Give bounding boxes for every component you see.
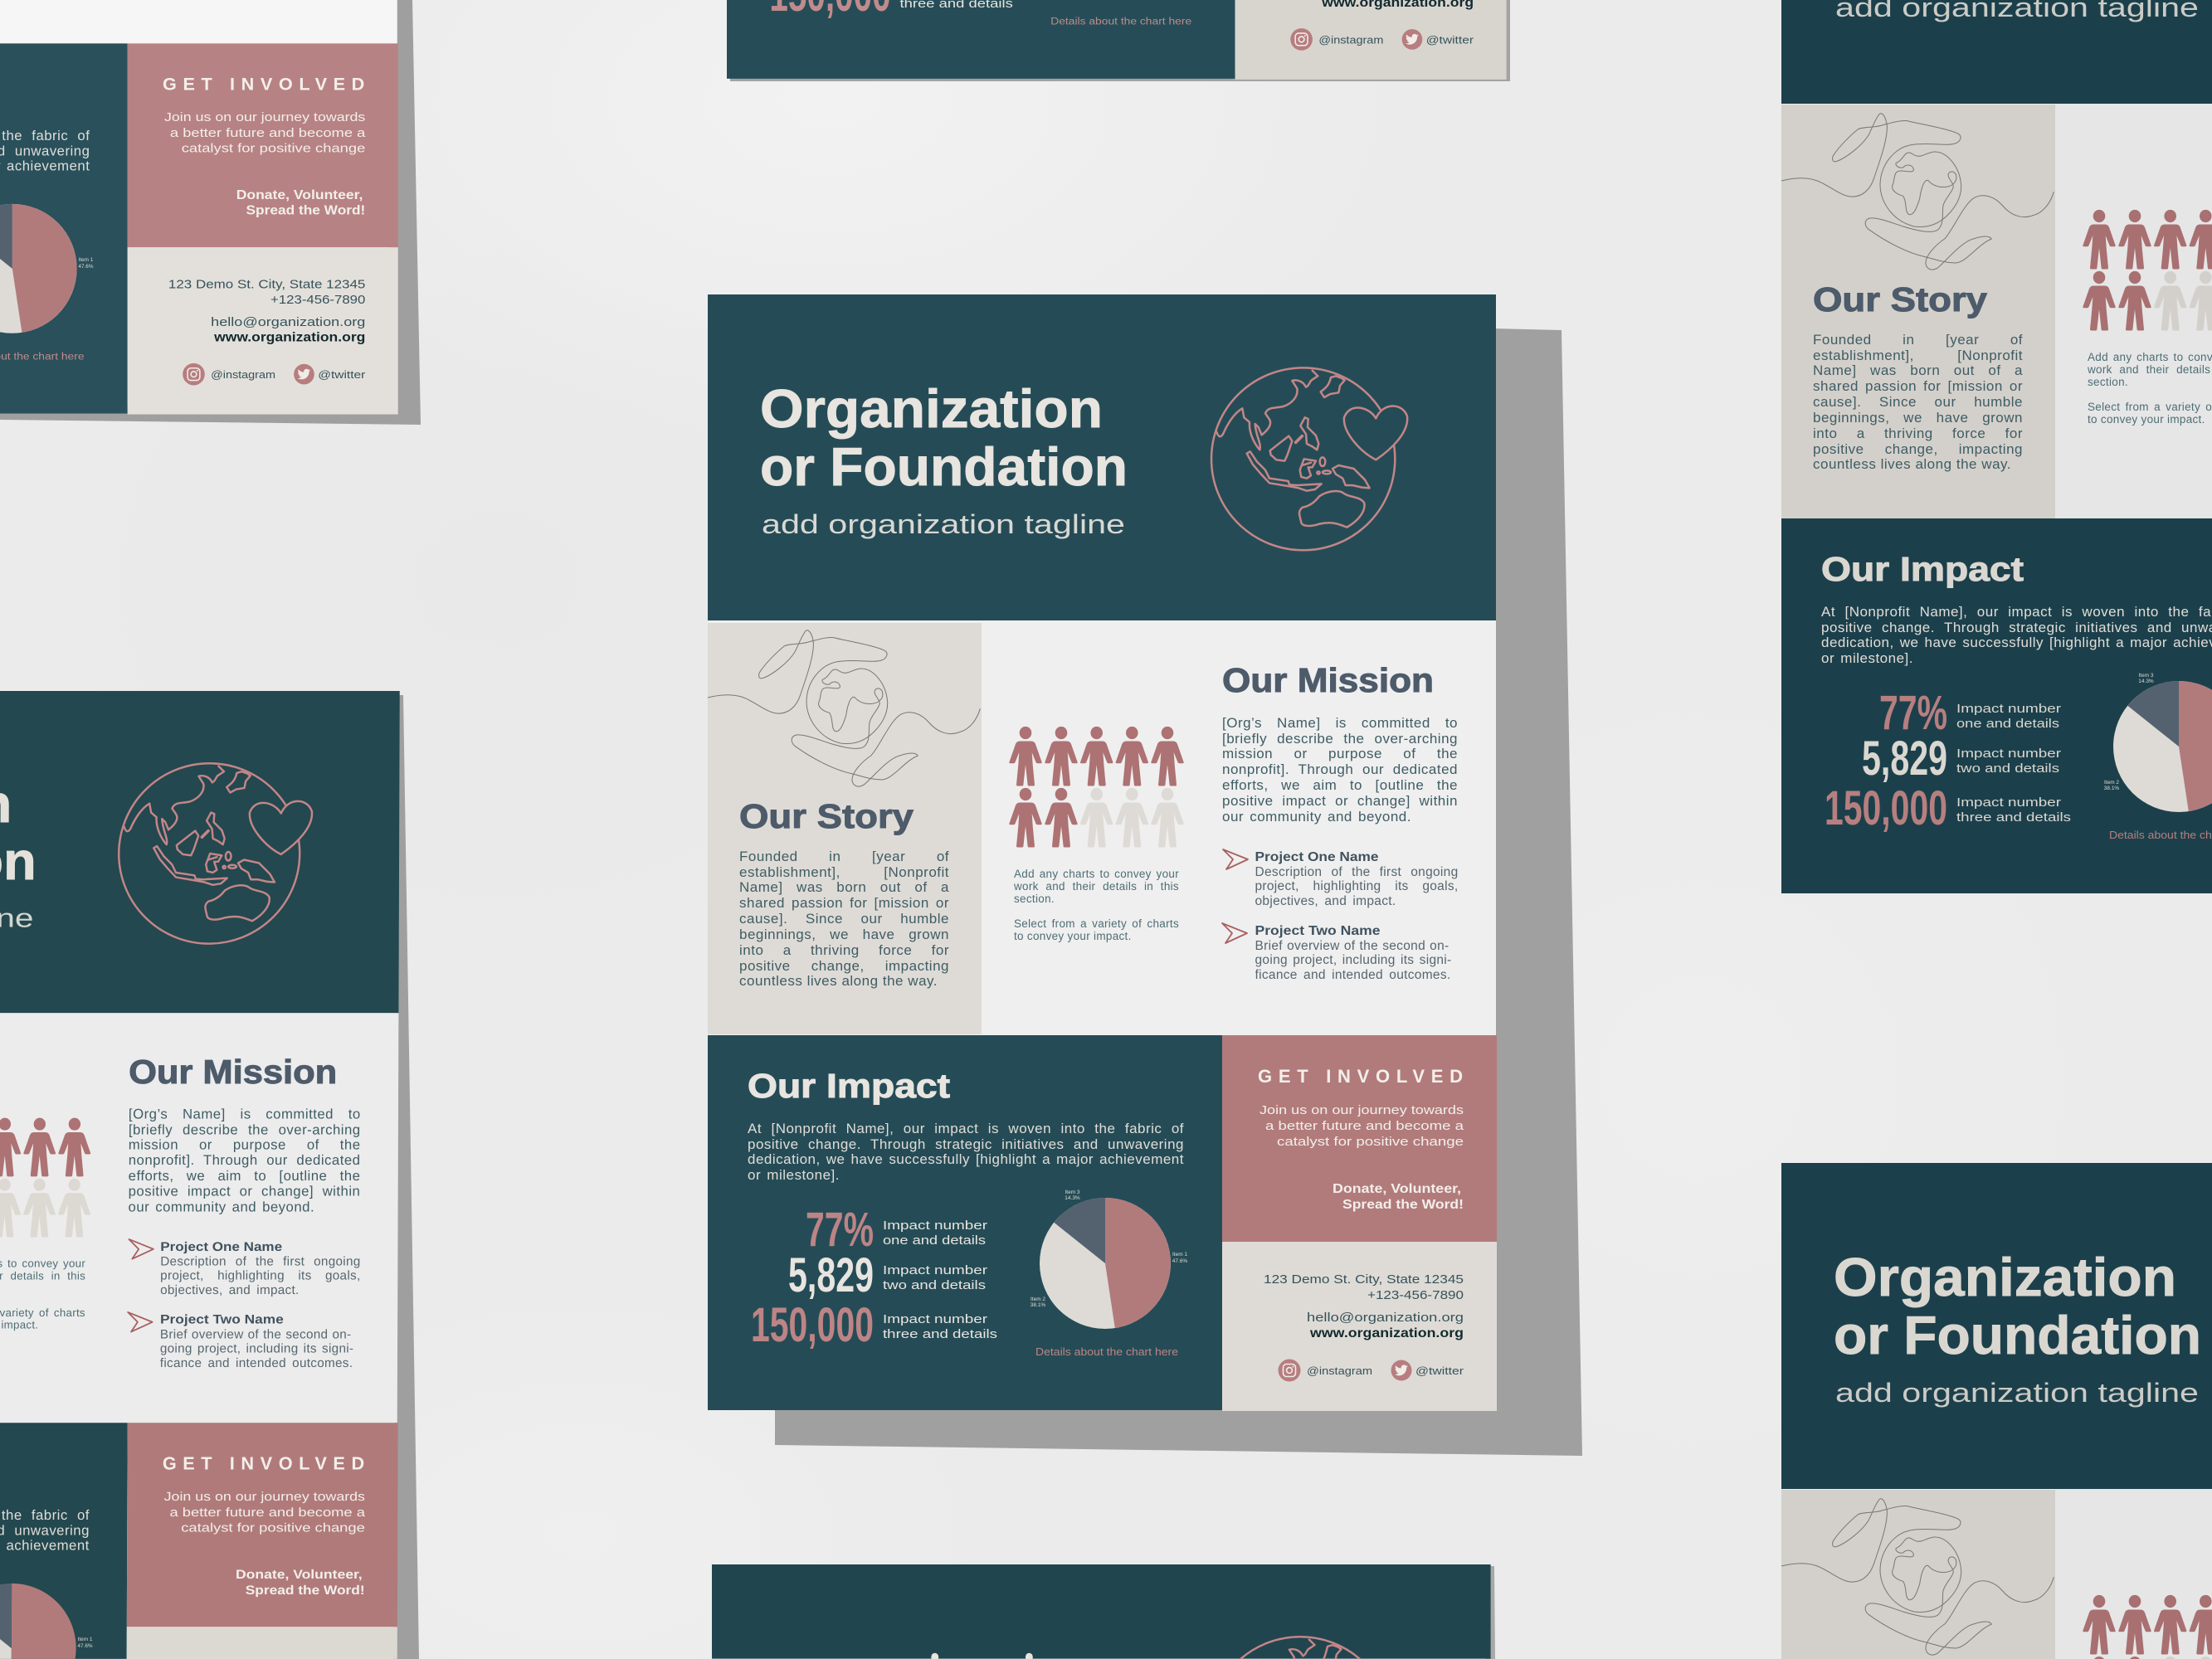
contact text: hello@organization.org [211, 316, 365, 329]
icon: arrow [1222, 923, 1247, 943]
icon: twitter [1391, 1360, 1412, 1380]
donate text: Donate, Volunteer, [236, 1568, 363, 1582]
impact number two: 5,829 [788, 1248, 874, 1302]
pie labels: 47.6% [1172, 1258, 1187, 1264]
flyer: right bottom [1781, 1163, 2212, 1659]
heading: our impact: Our Impact [748, 1067, 950, 1105]
heading: our impact: Our Impact [1821, 550, 2024, 588]
project one: project, highlighting its goals, [160, 1269, 361, 1283]
pie chart [2113, 681, 2212, 812]
impact paragraph [0, 1508, 90, 1574]
icon: globe with heart [1211, 367, 1407, 550]
pie labels: Item 1 [1172, 1252, 1187, 1258]
impact number two [1862, 732, 2061, 786]
chart note: Add any charts to convey your [1014, 868, 1179, 880]
title [1834, 1247, 2201, 1365]
shadow: top-centre flyer [730, 0, 1510, 81]
impact number one: Impact number [883, 1219, 987, 1233]
title: or Foundation [760, 436, 1128, 497]
chart note: section. [1014, 893, 1055, 905]
impact number three: 150,000 [1825, 781, 1947, 835]
twitter handle: @twitter [1415, 1365, 1464, 1377]
story paragraph: shared passion for [mission or [739, 895, 949, 911]
chart note: Select from a variety of charts [1014, 917, 1179, 930]
heading: our story: Our Story [1813, 280, 1987, 319]
mission paragraph: [briefly describe the over-arching [129, 1121, 361, 1137]
flyer: bottom-centre cropped [712, 1564, 1491, 1659]
story paragraph: beginnings, we have grown [739, 927, 949, 942]
story paragraph: positive change, impacting [739, 958, 949, 974]
impact paragraph: or milestone]. [748, 1167, 840, 1183]
contact text: 123 Demo St. City, State 12345 [1264, 1272, 1464, 1287]
instagram handle: @instagram [1318, 33, 1383, 46]
impact paragraph: dedication, we have successfully [highlight a major achievement [748, 1151, 1184, 1167]
pie labels: Item 2 [1030, 1297, 1045, 1302]
call to action text: catalyst for positive change [1277, 1135, 1464, 1149]
impact paragraph [1821, 605, 2212, 671]
chart caption: Details about the chart here [1050, 16, 1191, 27]
panel: our story [1781, 1490, 2055, 1659]
icon: globe top [1241, 1637, 1360, 1659]
flyer: central main [708, 294, 1497, 1411]
flyer: top-centre cropped [727, 0, 1507, 80]
title letter tops [931, 1653, 1033, 1659]
project two: ficance and intended outcomes. [1255, 968, 1450, 982]
contact text [1264, 1272, 1464, 1340]
project one: Project One Name [160, 1240, 282, 1254]
chart note: work and their details in this [1014, 880, 1179, 893]
impact number two: Impact number [883, 1263, 987, 1277]
story paragraph: beginnings, we have grown [1813, 410, 2023, 426]
story paragraph: establishment], [Nonprofit [1813, 348, 2023, 363]
heading: get involved: GET INVOLVED [163, 74, 364, 95]
chart note [0, 1258, 85, 1340]
panel: contact [127, 1627, 397, 1659]
icon: arrow [129, 1239, 153, 1259]
panel: get involved [127, 1423, 398, 1627]
heading: our mission: Our Mission [1222, 661, 1434, 699]
title: Organization [1834, 1247, 2176, 1307]
shadow: bottom-centre flyer [1485, 1566, 1495, 1659]
panel: get involved [1222, 1035, 1497, 1242]
impact number one: 77% [1879, 686, 1947, 740]
impact number two [788, 1248, 987, 1302]
impact number two: Impact number [1956, 747, 2061, 761]
call to action text [1259, 1103, 1464, 1149]
panel: white body [0, 1013, 398, 1423]
chart caption: Details about the chart here [1035, 1346, 1178, 1358]
story paragraph: establishment], [Nonprofit [739, 864, 949, 880]
donate text [236, 188, 365, 218]
shadow: central flyer [775, 328, 1582, 1456]
chart note: to convey your impact. [2088, 413, 2205, 426]
story paragraph: into a thriving force for [1813, 426, 2023, 441]
mission paragraph [1222, 716, 1458, 832]
panel: header [1781, 1163, 2212, 1489]
panel: our story [1781, 105, 2055, 518]
panel: our mission [1222, 661, 1459, 985]
panel: our impact [727, 0, 1235, 79]
panel: header [712, 1564, 1491, 1659]
call to action text: Join us on our journey towards [1259, 1103, 1464, 1117]
donate text [236, 1568, 365, 1598]
donate text: Spread the Word! [246, 204, 365, 218]
pie label: item 1: 47.6% [78, 264, 94, 270]
pie labels: 38.1% [2104, 786, 2119, 791]
panel: header [0, 691, 400, 1013]
impact number one: 77% [806, 1203, 874, 1257]
panel: white body [708, 620, 1496, 1035]
project two: Project Two Name [1255, 924, 1381, 938]
call to action text: Join us on our journey towards [164, 1491, 365, 1504]
story paragraph: cause]. Since our humble [1813, 394, 2023, 410]
pie labels [1030, 1190, 1187, 1308]
icon: instagram [1290, 28, 1313, 51]
tagline: add organization tagline [1835, 1378, 2199, 1408]
shadow: left flyer [393, 695, 419, 1659]
project two: going project, including its signi- [1255, 953, 1452, 967]
story paragraph [1813, 333, 2023, 478]
project two: ficance and intended outcomes. [160, 1357, 353, 1370]
project one: objectives, and impact. [160, 1284, 300, 1297]
icon: globe with heart [119, 763, 312, 944]
mission paragraph: efforts, we aim to [outline the [129, 1168, 360, 1184]
tagline: add organization tagline [762, 509, 1125, 539]
impact paragraph [748, 1121, 1184, 1188]
impact number two: two and details [883, 1278, 986, 1292]
contact text: 123 Demo St. City, State 12345 [168, 278, 365, 292]
panel: contact [128, 247, 398, 415]
icon: arrow [128, 1312, 153, 1332]
illustration: hands holding globe [708, 630, 980, 786]
flyer: top-left cropped [0, 0, 398, 415]
pie label: item 1: Item 1 [79, 257, 94, 263]
project two: Brief overview of the second on- [1255, 939, 1449, 953]
illustration: hands holding globe [1781, 114, 2054, 270]
story paragraph: Name] was born out of a [739, 879, 949, 895]
call to action text [164, 1491, 366, 1535]
pie labels: 14.3% [1065, 1195, 1080, 1201]
call to action text: a better future and become a [170, 127, 366, 140]
project two: going project, including its signi- [160, 1342, 353, 1356]
call to action text: catalyst for positive change [181, 1522, 365, 1535]
icon: instagram [1278, 1359, 1301, 1382]
mission paragraph: mission or purpose of the [1222, 746, 1458, 761]
chart note: to convey your impact. [1014, 930, 1132, 942]
chart note: section. [2088, 376, 2128, 388]
heading: our story: Our Story [739, 797, 914, 835]
title [760, 378, 1128, 497]
pie labels: Item 3 [2138, 673, 2154, 679]
impact paragraph: or milestone]. [1821, 650, 1913, 666]
story paragraph: into a thriving force for [739, 942, 949, 958]
pie labels: 38.1% [1030, 1302, 1045, 1308]
impact paragraph [0, 129, 90, 194]
impact number one: one and details [1956, 717, 2059, 731]
panel: white body [2055, 1489, 2212, 1659]
project one: project, highlighting its goals, [1255, 879, 1459, 893]
mission paragraph: our community and beyond. [129, 1199, 314, 1214]
pie labels: 14.3% [2138, 679, 2154, 684]
panel: white body [2055, 104, 2212, 518]
mission paragraph: [briefly describe the over-arching [1222, 731, 1458, 747]
panel: get involved [128, 43, 398, 247]
panel: header [708, 294, 1496, 620]
heading: get involved: GET INVOLVED [163, 1453, 364, 1474]
people chart [0, 1118, 90, 1238]
project one: Description of the first ongoing [160, 1254, 361, 1268]
impact number one [806, 1203, 987, 1257]
impact number three: Impact number [1956, 795, 2061, 810]
contact text: +123-456-7890 [270, 294, 365, 307]
panel: contact [1235, 0, 1507, 80]
call to action text [164, 111, 366, 156]
project one: Project One Name [1255, 850, 1379, 864]
impact number one: one and details [883, 1233, 986, 1248]
mission paragraph: positive impact or change] within [129, 1184, 360, 1199]
contact text: www.organization.org [1309, 1326, 1464, 1340]
impact number three: three and details [883, 1327, 997, 1341]
contact text: www.organization.org [213, 331, 365, 345]
project one: objectives, and impact. [1255, 894, 1396, 908]
project one: Description of the first ongoing [1255, 865, 1459, 879]
icon: twitter [1402, 29, 1422, 50]
icon: arrow [1223, 849, 1248, 869]
donate text: Spread the Word! [246, 1584, 365, 1598]
flyer: left [0, 691, 401, 1659]
mission paragraph: efforts, we aim to [outline the [1222, 777, 1458, 793]
icon: twitter [294, 364, 314, 384]
pie labels: Item 2 [2104, 780, 2119, 786]
title: or Foundation [1834, 1305, 2201, 1365]
project one [160, 1240, 361, 1301]
shadow: right top flyer [1786, 888, 2212, 893]
donate text [1333, 1182, 1464, 1212]
contact text: +123-456-7890 [1367, 1288, 1464, 1302]
panel: white area [0, 0, 397, 49]
panel: our impact [0, 1423, 128, 1659]
panel: our story [708, 623, 982, 1034]
twitter handle: @twitter [1426, 33, 1474, 46]
heading: get involved: GET INVOLVED [1258, 1066, 1463, 1087]
heading: our mission: Our Mission [129, 1053, 337, 1091]
pie chart [1040, 1198, 1171, 1329]
panel: header [1781, 0, 2212, 104]
illustration: hands holding globe [1781, 1499, 2054, 1655]
call to action text: catalyst for positive change [182, 143, 365, 156]
mission paragraph: nonprofit]. Through our dedicated [129, 1152, 361, 1168]
impact number one [1879, 686, 2061, 740]
people chart [2083, 210, 2212, 330]
pie label: item 1: 47.6% [77, 1643, 93, 1649]
chart note [2088, 351, 2212, 435]
story paragraph [739, 849, 949, 995]
impact number three: three and details [1956, 810, 2071, 825]
project two: Project Two Name [160, 1313, 284, 1327]
people chart [1009, 727, 1184, 848]
icon: instagram [183, 363, 205, 385]
project one [1255, 850, 1459, 912]
mission paragraph: mission or purpose of the [129, 1137, 361, 1153]
people chart [2083, 1595, 2212, 1659]
mission paragraph [128, 1107, 361, 1222]
twitter handle: @twitter [318, 368, 366, 381]
instagram handle: @instagram [1307, 1365, 1372, 1377]
impact number one: Impact number [1956, 702, 2061, 716]
instagram handle: @instagram [211, 368, 275, 381]
flyer: right top [1781, 0, 2212, 893]
story paragraph: cause]. Since our humble [739, 911, 949, 927]
chart note [1014, 868, 1179, 952]
pie chart [0, 204, 77, 333]
panel: our impact [708, 1035, 1222, 1410]
pie label: item 1: Item 1 [78, 1637, 93, 1642]
pie labels: Item 3 [1065, 1190, 1080, 1195]
mission paragraph: nonprofit]. Through our dedicated [1222, 761, 1458, 777]
story paragraph: countless lives along the way. [1813, 456, 2011, 472]
call to action text: a better future and become a [1265, 1119, 1464, 1133]
contact text [168, 278, 365, 345]
donate text: Spread the Word! [1342, 1198, 1464, 1212]
shadow: top-left flyer [0, 0, 421, 425]
project two [160, 1313, 353, 1374]
contact text: hello@organization.org [1307, 1311, 1464, 1325]
story paragraph: positive change, impacting [1813, 441, 2023, 457]
panel: contact [1222, 1242, 1497, 1411]
impact number two: 5,829 [1862, 732, 1947, 786]
donate text: Donate, Volunteer, [236, 188, 363, 202]
donate text: Donate, Volunteer, [1333, 1182, 1461, 1196]
title: Organization [760, 378, 1103, 439]
impact number two: two and details [1956, 761, 2059, 776]
pie labels [2104, 673, 2154, 791]
pie chart [0, 1584, 76, 1659]
project two: Brief overview of the second on- [160, 1327, 351, 1341]
story paragraph: shared passion for [mission or [1813, 378, 2023, 394]
panel: our impact [1781, 518, 2212, 893]
call to action text: Join us on our journey towards [164, 111, 365, 124]
call to action text: a better future and become a [169, 1506, 366, 1520]
impact number three: 150,000 [751, 1298, 874, 1352]
impact paragraph: positive change. Through strategic initiatives and unwavering [748, 1136, 1184, 1152]
project two [1255, 924, 1452, 985]
impact number three: Impact number [883, 1312, 987, 1326]
mission paragraph: positive impact or change] within [1222, 793, 1458, 809]
panel: our impact [0, 43, 128, 414]
story paragraph: Name] was born out of a [1813, 362, 2023, 378]
mission paragraph: our community and beyond. [1222, 809, 1411, 825]
story paragraph: countless lives along the way. [739, 973, 938, 989]
